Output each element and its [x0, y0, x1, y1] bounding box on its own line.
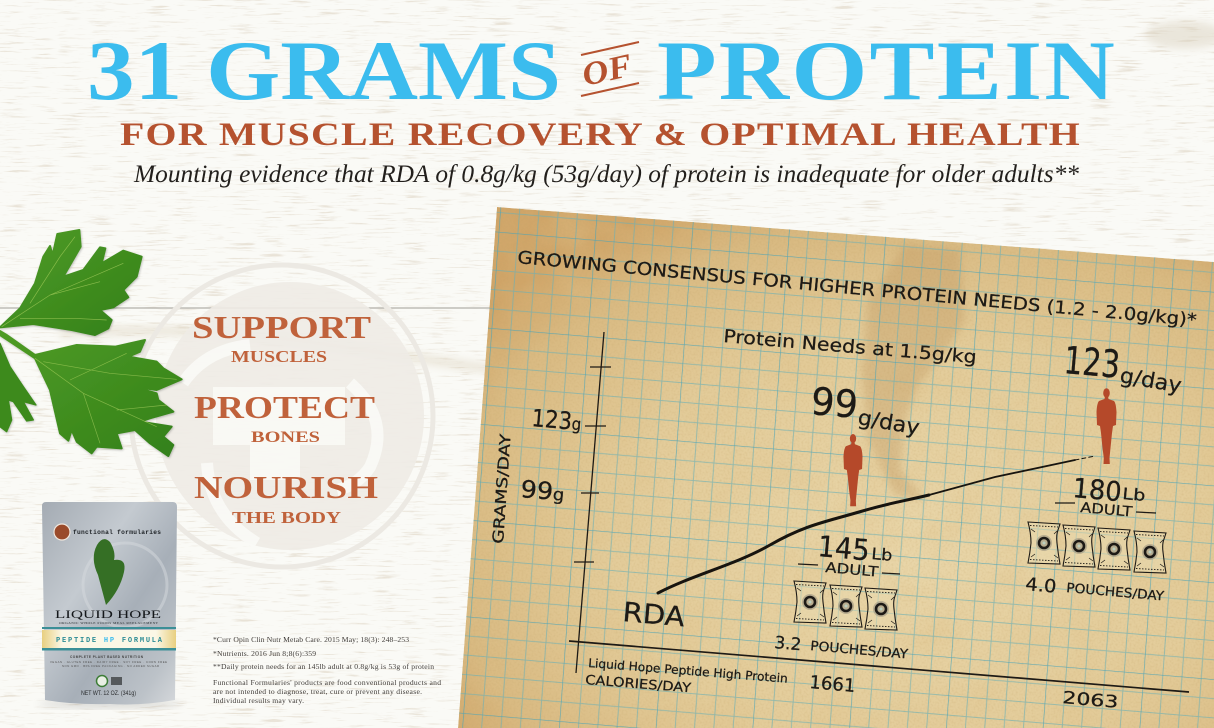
parsley leaf illustration [0, 230, 182, 456]
footnotes: Individual results may vary. [213, 696, 304, 705]
145 lb adult label [798, 529, 900, 581]
y axis title: GRAMS/DAY [489, 432, 515, 544]
pouch logo: functional formularies [73, 529, 161, 536]
title connector: of: OF [579, 48, 636, 94]
99 g/day value: 99 [809, 379, 860, 427]
99 g/day value: g/day [856, 405, 921, 440]
x axis value 1661: 1661 [809, 672, 856, 697]
4.0 pouches per day: 4.0 [1025, 574, 1057, 598]
RDA label: RDA [621, 597, 686, 633]
formula band: PEPTIDE HP FORMULA [56, 637, 163, 645]
subtitle: FOR MUSCLE RECOVERY & OPTIMAL HEALTH [120, 117, 1081, 153]
paper sheet [455, 205, 1214, 728]
tagline: Mounting evidence that RDA of 0.8g/kg (53g/day) of protein is inadequate for older adults** [133, 161, 1080, 188]
nourish the body: THE BODY [232, 508, 341, 527]
figure: 180 lb adult [1096, 388, 1116, 464]
y axis [574, 332, 611, 673]
title: PROTEIN [657, 24, 1117, 118]
product pouch: COMPLETE PLANT BASED NUTRITION [70, 655, 144, 659]
123 g/day value: 123 [1062, 338, 1122, 387]
180 lb adult label: ADULT [1080, 500, 1133, 521]
4.0 pouches per day: POUCHES/DAY [1066, 581, 1165, 605]
kale leaf [94, 539, 125, 605]
footnotes: *Curr Opin Clin Nutr Metab Care. 2015 May; 18(3): 248–253 [213, 635, 409, 644]
support muscles: MUSCLES [231, 347, 327, 366]
180 lb adult label: 180 [1071, 473, 1123, 508]
pouch logo [54, 524, 161, 540]
y axis label 99g: 99g [519, 475, 566, 507]
y axis label 123g: 123g [530, 404, 583, 436]
chart heading: GROWING CONSENSUS FOR HIGHER PROTEIN NEEDS (1.2 - 2.0g/kg)* [517, 248, 1198, 331]
product name: LIQUID HOPE [55, 607, 161, 621]
product pouch: ORGANIC WHOLE FOODS MEAL REPLACEMENT [59, 621, 159, 625]
product pouch: NET WT. 12 OZ. (341g) [81, 690, 136, 697]
lower leaflet [0, 331, 182, 456]
footnotes: Functional Formularies' products are food conventional products and [213, 678, 441, 687]
180 lb adult label: Lb [1122, 484, 1146, 505]
180 lb adult label [1055, 473, 1156, 521]
support muscles: SUPPORT [192, 309, 371, 345]
protein curve [658, 456, 1095, 593]
99 g/day value [809, 379, 921, 440]
support muscles [192, 309, 371, 366]
protect bones: BONES [251, 429, 320, 446]
footnotes: **Daily protein needs for an 145lb adult at 0.8g/kg is 53g of protein [213, 662, 434, 671]
nourish the body: NOURISH [194, 469, 378, 505]
x axis caption: Liquid Hope Peptide High Protein [588, 656, 788, 686]
x axis [569, 641, 1189, 692]
product pouch [38, 502, 182, 708]
123 g/day value: g/day [1118, 363, 1183, 398]
product pouch: VEGAN · GLUTEN FREE · DAIRY FREE · SOY FREE · CORN FREE [50, 660, 167, 664]
upper leaflet [0, 230, 142, 335]
small left leaflet [0, 343, 36, 432]
x axis caption: CALORIES/DAY [585, 673, 692, 696]
footnotes: *Nutrients. 2016 Jun 8;8(6):359 [213, 649, 316, 658]
benefit list [192, 309, 378, 527]
figure: 145 lb adult [843, 434, 863, 506]
graph paper chart panel [455, 205, 1214, 728]
3.2 pouches per day [774, 633, 909, 663]
x axis value 2063: 2063 [1062, 688, 1119, 713]
footnotes [213, 635, 441, 705]
title [87, 24, 1117, 118]
3.2 pouches per day: POUCHES/DAY [810, 639, 909, 663]
watermark logo [131, 265, 433, 567]
footnotes: are not intended to diagnose, treat, cure or prevent any disease. [213, 687, 422, 696]
123 g/day value [1062, 338, 1183, 398]
product pouch: NON GMO · BPA FREE PACKAGING · NO ADDED SUGAR [62, 664, 159, 668]
nourish the body [194, 469, 378, 527]
pouches: 3.2 per day [794, 581, 897, 630]
145 lb adult label: 145 [816, 529, 871, 568]
formula band [42, 627, 176, 650]
protect bones [194, 389, 375, 446]
3.2 pouches per day: 3.2 [774, 633, 802, 655]
145 lb adult label: Lb [871, 544, 893, 565]
145 lb adult label: ADULT [825, 560, 879, 581]
pouches: 4.0 per day [1028, 522, 1166, 573]
organic seal [96, 676, 122, 686]
chart subheading: Protein Needs at 1.5g/kg [723, 326, 977, 368]
4.0 pouches per day [1025, 574, 1165, 605]
title: 31 GRAMS [87, 24, 561, 118]
protect bones: PROTECT [194, 389, 375, 425]
